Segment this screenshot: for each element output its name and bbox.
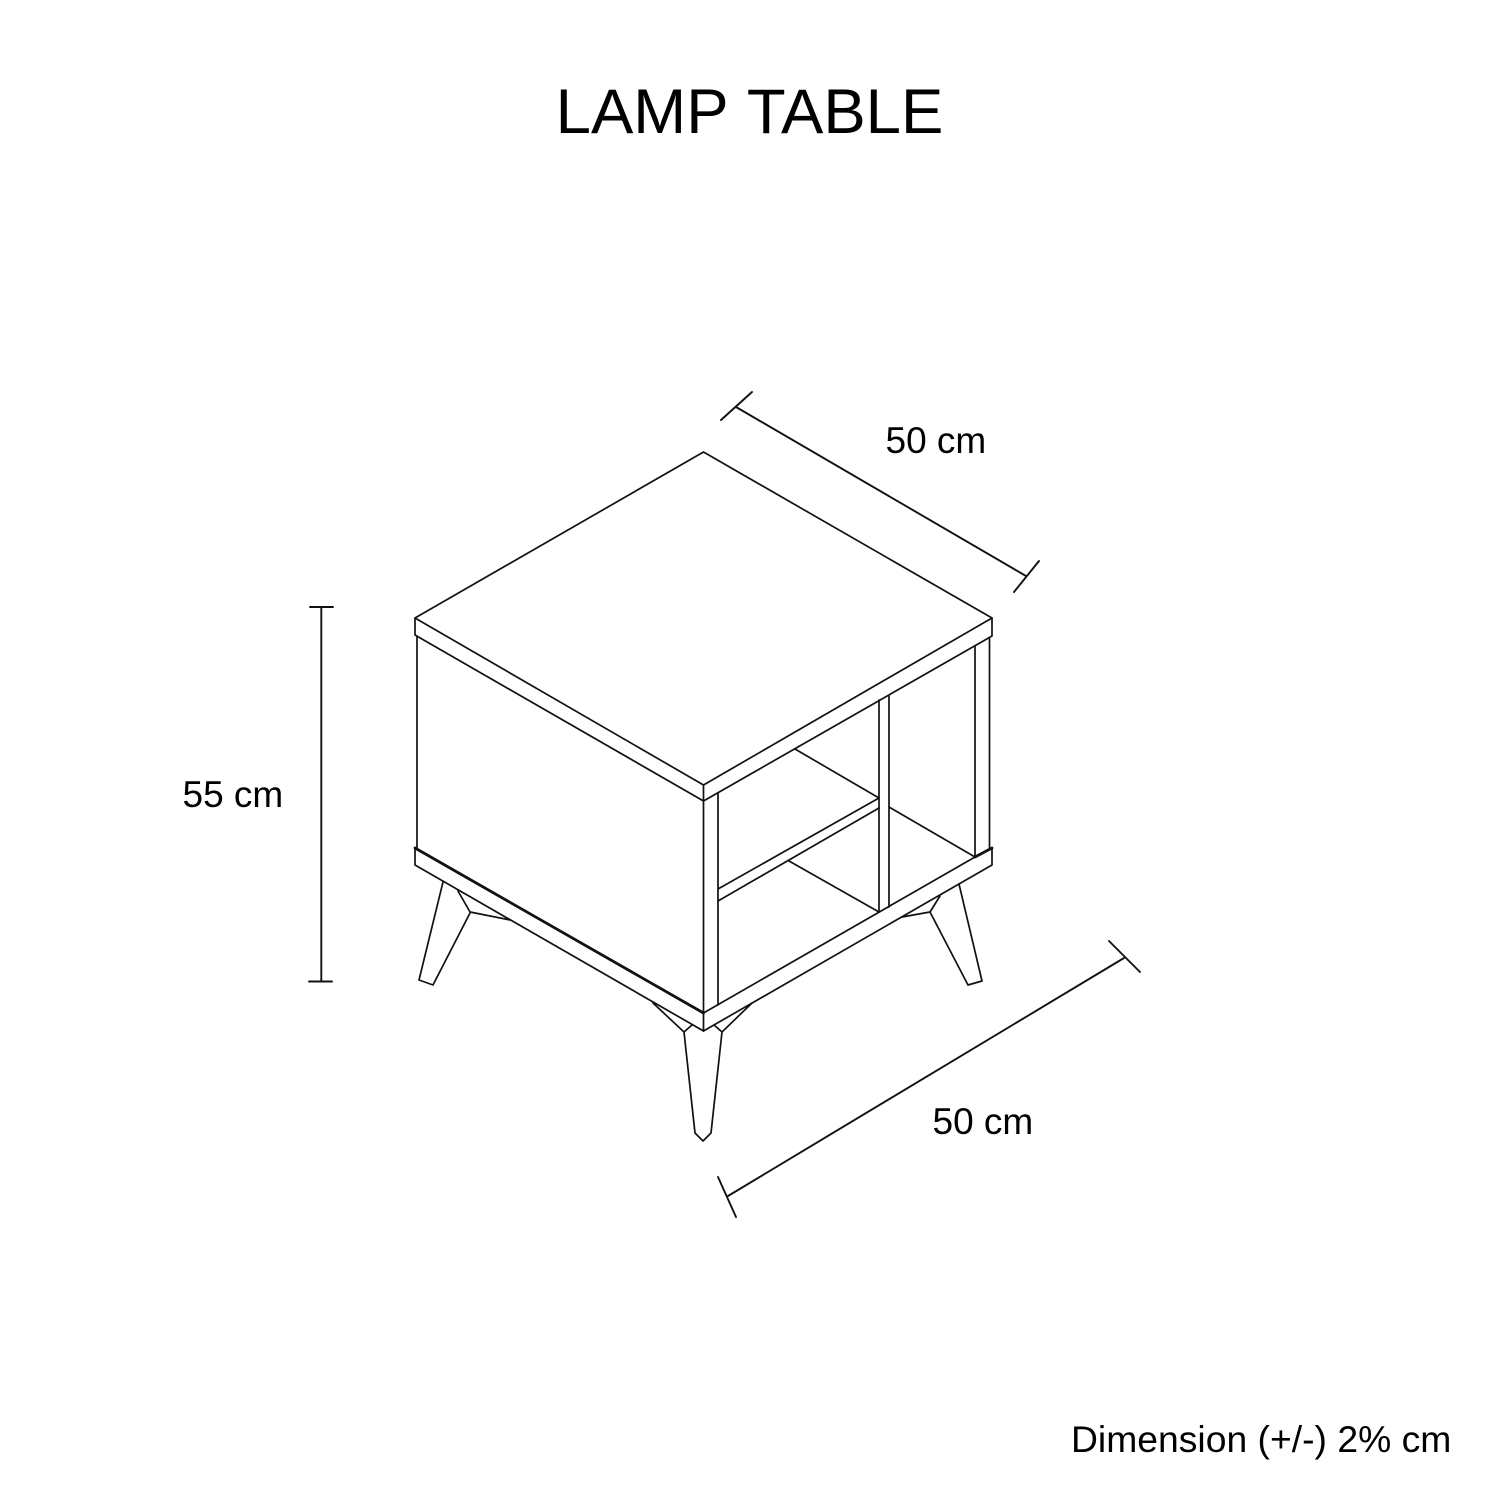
left leg [419, 882, 510, 985]
shelf [718, 749, 879, 912]
right leg [902, 884, 982, 985]
dimension line: depth 50 cm [721, 392, 1039, 592]
left side panel [416, 636, 418, 848]
back floor edge [889, 807, 975, 857]
middle divider [879, 696, 889, 912]
dimension line: height 55 cm [309, 607, 333, 982]
bottom plinth [415, 848, 992, 1031]
label: height: 55 cm [182, 774, 283, 815]
tolerance note: Dimension (+/-) 2% cm [1071, 1418, 1451, 1460]
front leg [653, 1003, 752, 1141]
right post [975, 638, 990, 857]
table top [415, 452, 992, 801]
label: depth: 50 cm [886, 420, 986, 461]
illustration: lamp table line drawing [415, 452, 992, 1141]
front post [704, 793, 718, 1013]
label: width: 50 cm [932, 1101, 1033, 1142]
title: LAMP TABLE [556, 77, 943, 147]
dimension line: width 50 cm [718, 941, 1140, 1217]
